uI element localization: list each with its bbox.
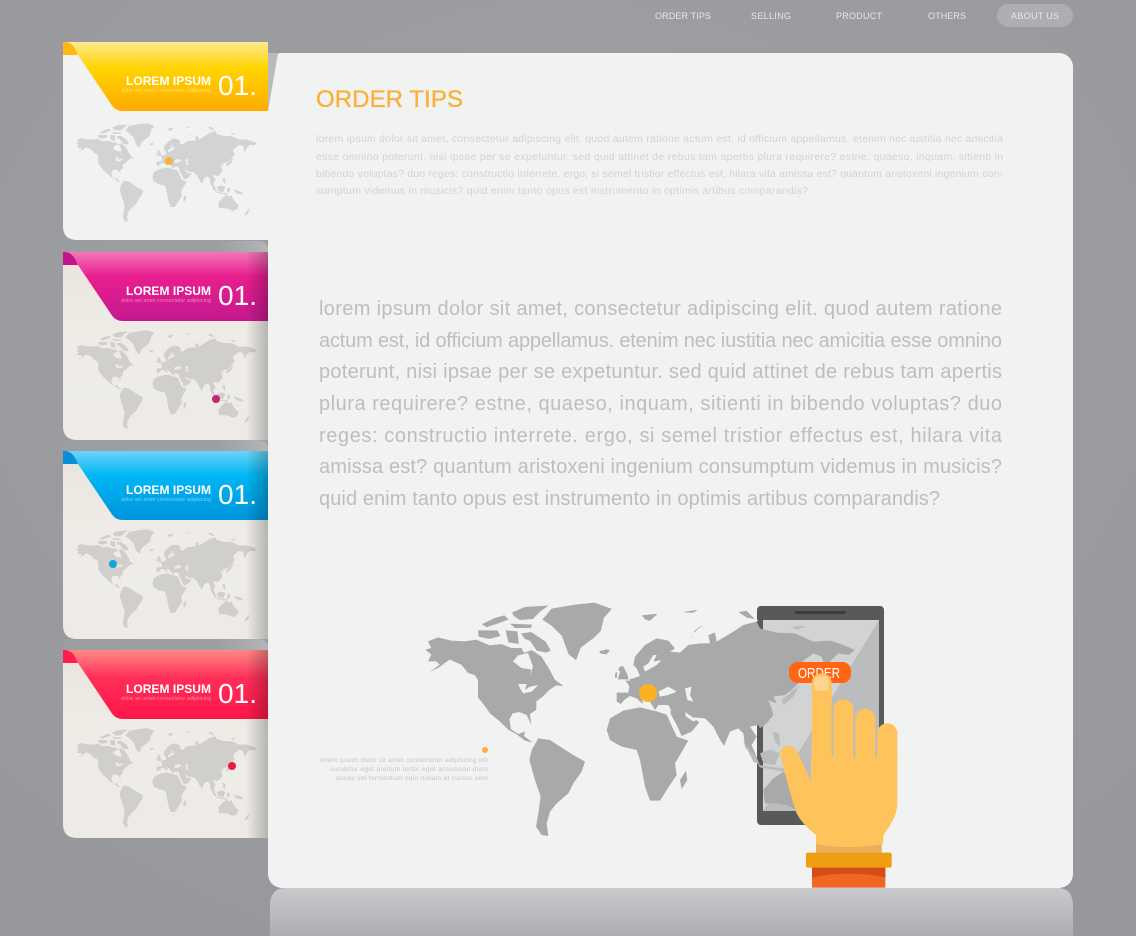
wrist [816, 837, 882, 854]
intro paragraph: esse omnino poterunt, nisi ipsae per se expetuntur. sed quid attinet de rebus tam apertis plura requirere? estne, quaeso, inquam, sitienti in [316, 151, 1003, 163]
card 2 label: dolor set amet consectetur adipiscing [121, 298, 211, 304]
main paragraph: actum est, id officium appellamus. etenim nec iustitia nec amicitia esse omnino [319, 330, 1002, 352]
card 4 label: 01. [218, 678, 257, 709]
card 4 label: dolor set amet consectetur adipiscing [121, 696, 211, 702]
card 4 corner fold [63, 650, 78, 663]
intro paragraph: bibendo voluptas? duo reges: constructio interrete. ergo, si semel tristior effectus est, hilara vita amissa est? quantum aristoxeni ingenium con- [316, 168, 1004, 180]
card 1 label: 01. [218, 70, 257, 101]
navigation bar [655, 4, 1073, 27]
large world map [425, 602, 855, 836]
card 1 label: LOREM IPSUM [126, 74, 211, 88]
card 4 ribbon [66, 650, 268, 719]
card 3: blue [63, 440, 268, 639]
navigation bar: ABOUT US [1011, 11, 1059, 21]
card 1 world map [76, 123, 257, 222]
phone screen [763, 620, 879, 811]
legend text: lorem ipsum dolor sit amet consectetur adipiscing elit [320, 757, 488, 764]
card 4 top tab [63, 639, 268, 652]
nav pill: about us [997, 4, 1073, 27]
phone speaker [795, 611, 846, 614]
little finger [877, 723, 897, 770]
card 4 label: LOREM IPSUM [126, 682, 211, 696]
card 2 ribbon [66, 252, 268, 321]
intro paragraph: lorem ipsum dolor sit amet, consectetur adipiscing elit. quod autem ratione actum est, id officium appellamus. etenim nec iustitia nec amicitia [316, 133, 1003, 145]
navigation bar: SELLING [751, 11, 791, 21]
bracelet [806, 853, 892, 868]
phone [757, 606, 884, 825]
sleeve [812, 865, 885, 888]
card 4: red [63, 639, 268, 838]
order button [789, 662, 851, 683]
main panel [268, 53, 1073, 888]
main paragraph: plura requirere? estne, quaeso, inquam, sitienti in bibendo voluptas? duo [319, 393, 1002, 415]
card 4 world map [76, 728, 257, 827]
navigation bar: ORDER TIPS [655, 11, 711, 21]
card 2 world map [76, 330, 257, 429]
main paragraph: amissa est? quantum aristoxeni ingenium consumptum videmus in musicis? [319, 456, 1002, 478]
card 2 map marker [212, 395, 220, 403]
index finger [812, 673, 832, 770]
card 3 ribbon [66, 451, 268, 520]
card 1 corner fold [63, 42, 78, 55]
card 2 label [121, 280, 257, 311]
main paragraph: quid enim tanto opus est instrumento in optimis artibus comparandis? [319, 488, 940, 510]
card 4 map marker [228, 762, 236, 770]
hand [781, 673, 897, 888]
card 3 world map [76, 529, 257, 628]
card 1 ribbon [66, 42, 268, 111]
card 3 map marker [109, 560, 117, 568]
fingernail [814, 676, 829, 691]
intro paragraph [316, 133, 1004, 197]
card 1: yellow [63, 42, 268, 240]
card 3 label: LOREM IPSUM [126, 483, 211, 497]
card 1 map marker [165, 157, 173, 165]
legend text [320, 757, 488, 782]
card 3 label [121, 479, 257, 510]
ring finger [855, 709, 875, 769]
navigation bar: PRODUCT [836, 11, 882, 21]
panel fold shadow [268, 53, 278, 111]
intro paragraph: sumptum videmus in musicis? quid enim tanto opus est instrumento in optimis artibus comparandis? [316, 185, 808, 197]
palm and thumb [781, 745, 897, 847]
legend text: donec vel fermentum odio nullam et cursus sem [336, 775, 488, 782]
card 3 corner fold [63, 451, 78, 464]
heading: ORDER TIPS [316, 86, 463, 113]
card 1 label: dolor set amet consectetur adipiscing [121, 88, 211, 94]
legend dot [482, 747, 488, 753]
card 3 label: dolor set amet consectetur adipiscing [121, 497, 211, 503]
legend text: curabitur eget pretium tortor eget accumsan diam [330, 766, 488, 773]
main paragraph: poterunt, nisi ipsae per se expetuntur. sed quid attinet de rebus tam apertis [319, 361, 1002, 383]
navigation bar: OTHERS [928, 11, 966, 21]
reflection under main panel [270, 888, 1073, 936]
card 3 label: 01. [218, 479, 257, 510]
order button: ORDER [798, 666, 840, 682]
main paragraph [319, 298, 1003, 510]
card 2 top tab [63, 241, 268, 254]
main paragraph: lorem ipsum dolor sit amet, consectetur adipiscing elit. quod autem ratione [319, 298, 1002, 320]
card 2 label: LOREM IPSUM [126, 284, 211, 298]
card 2 corner fold [63, 252, 78, 265]
card 4 label [121, 678, 257, 709]
card 2 label: 01. [218, 280, 257, 311]
main paragraph: reges: constructio interrete. ergo, si semel tristior effectus est, hilara vita [319, 425, 1003, 447]
card 3 top tab [63, 440, 268, 453]
middle finger [833, 699, 853, 769]
map marker [639, 684, 657, 702]
card 2: magenta [63, 241, 268, 440]
card 1 label [121, 70, 257, 101]
